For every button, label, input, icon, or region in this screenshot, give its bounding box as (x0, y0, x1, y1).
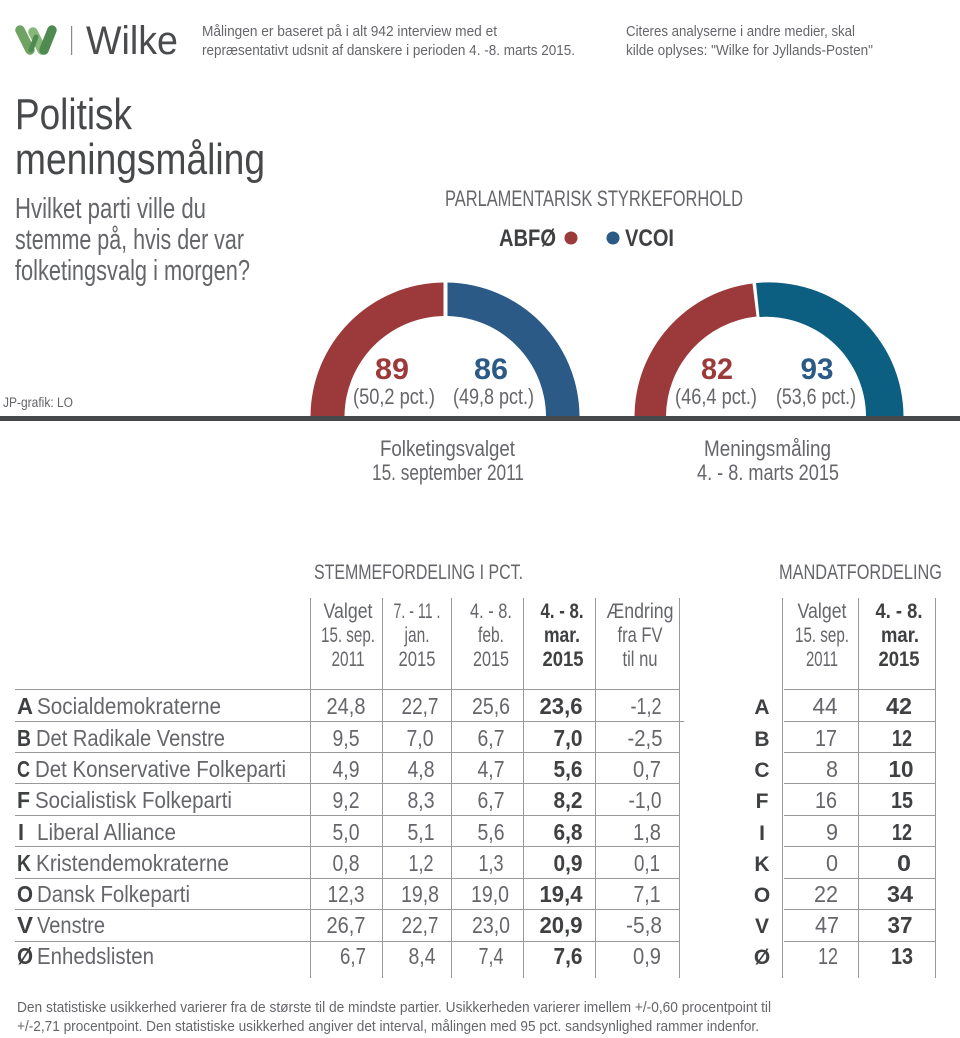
values: februar 2015: 23,0 (472, 912, 510, 938)
values: ændring: 0,9 (633, 943, 661, 969)
values: ændring: -5,8 (626, 912, 662, 938)
values: valget 2011: 0,8 (332, 850, 360, 876)
party letters: B (754, 728, 770, 751)
column headers: 15. sep. (321, 624, 375, 647)
party letters: V (755, 915, 769, 938)
column headers (795, 600, 922, 671)
legend: blocs: ABFØ (499, 225, 556, 252)
caption: folketingsvalget: 15. september 2011 (372, 460, 524, 485)
values: marts 2015: 19,4 (540, 881, 583, 907)
values: februar 2015: 6,7 (478, 787, 504, 813)
chart: meningsmåling 2015: 82 (701, 353, 733, 386)
column headers: 2011 (332, 648, 364, 671)
values: ændring: -1,2 (630, 693, 662, 719)
values: januar 2015: 7,0 (406, 725, 434, 751)
footnote: +/-2,71 procentpoint. Den statistiske usikkerhed angiver det interval, målingen med 95 pct. sandsynlighed rammer indenfor. (17, 1018, 759, 1035)
table: stemmefordeling (15, 598, 684, 978)
values: januar 2015: 8,3 (408, 787, 434, 813)
values: februar 2015: 6,7 (478, 725, 504, 751)
values: valget 2011: 9,5 (332, 725, 360, 751)
values: marts 2015: 23,6 (540, 693, 582, 719)
seats: valget 2011: 12 (818, 943, 838, 969)
logo: Wilke (20, 19, 178, 63)
caption: meningsmåling (697, 436, 839, 485)
values: januar 2015: 5,1 (408, 819, 434, 845)
chart: folketingsvalget 2011: 86 (474, 353, 508, 386)
values: ændring: 7,1 (634, 881, 660, 907)
party labels: A (17, 693, 33, 719)
column headers: 4. - 8. (540, 600, 584, 623)
seats: valget 2011: 22 (814, 881, 838, 907)
party labels: Kristendemokraterne (36, 850, 229, 876)
seats: marts 2015: 37 (888, 912, 912, 938)
text block: citation note (626, 23, 873, 59)
values: ændring: 0,1 (634, 850, 660, 876)
logo: Wilke: Wilke (86, 19, 178, 63)
caption: folketingsvalget (372, 436, 524, 485)
column headers: feb. (478, 624, 504, 647)
values: valget 2011: 5,0 (332, 819, 360, 845)
party labels: K (17, 850, 31, 876)
values: ændring: 0,7 (633, 756, 661, 782)
seats: valget 2011: 16 (815, 787, 837, 813)
party letters: O (754, 884, 770, 907)
chart: meningsmåling 2015: 93 (800, 353, 834, 386)
title (15, 90, 265, 184)
values: februar 2015: 1,3 (478, 850, 504, 876)
seats: marts 2015: 12 (892, 725, 912, 751)
title: Politisk (15, 90, 133, 139)
values: marts 2015: 20,9 (540, 912, 582, 938)
chart: folketingsvalget 2011 (310, 282, 580, 416)
table: mandatfordeling (754, 598, 936, 978)
icon: green W (20, 30, 52, 50)
seats: marts 2015 (886, 693, 914, 969)
legend: blocs: VCOI (625, 225, 674, 252)
seats: valget 2011: 17 (815, 725, 837, 751)
party labels: Enhedslisten (37, 943, 154, 969)
values: marts 2015: 7,6 (554, 943, 582, 969)
party labels: O (17, 881, 33, 907)
party labels: F (17, 787, 30, 813)
party labels: Socialistisk Folkeparti (35, 787, 232, 813)
subtitle question: folketingsvalg i morgen? (15, 255, 250, 287)
caption: meningsmåling: Meningsmåling (704, 436, 831, 461)
column headers: Ændring (606, 600, 674, 623)
values: marts 2015: 7,0 (554, 725, 582, 751)
seats: marts 2015: 34 (887, 881, 913, 907)
column headers: 2015 (398, 648, 436, 671)
values: ændring: -1,0 (628, 787, 662, 813)
party labels: C (17, 756, 30, 782)
column headers: Valget (798, 600, 847, 623)
seats: marts 2015: 10 (888, 756, 914, 782)
seats: valget 2011: 0 (826, 850, 838, 876)
values: ændring: -2,5 (628, 725, 662, 751)
values: valget 2011: 4,9 (332, 756, 360, 782)
seats: marts 2015: 15 (891, 787, 913, 813)
values: valget 2011: 24,8 (326, 693, 366, 719)
seats: valget 2011: 8 (826, 756, 838, 782)
chart: folketingsvalget 2011: (50,2 pct.) (353, 384, 435, 409)
column headers: mar. (881, 624, 919, 647)
party labels: Venstre (37, 912, 105, 938)
column headers: fra FV (618, 624, 662, 647)
column headers: 2015 (542, 648, 584, 671)
seats: marts 2015: 42 (886, 693, 912, 719)
party labels: B (17, 725, 31, 751)
column headers (321, 600, 674, 671)
values: marts 2015 (540, 693, 583, 969)
seats: valget 2011: 44 (812, 693, 838, 719)
values: marts 2015: 6,8 (554, 819, 583, 845)
party labels: Det Konservative Folkeparti (35, 756, 286, 782)
column headers: jan. (404, 624, 430, 647)
values: januar 2015: 8,4 (408, 943, 436, 969)
values: januar 2015: 22,7 (402, 912, 438, 938)
values: valget 2011: 26,7 (326, 912, 366, 938)
text block: method note: Målingen er baseret på i alt 942 interview med et (202, 23, 498, 40)
seats: marts 2015: 13 (891, 943, 913, 969)
subtitle question (15, 193, 250, 287)
party labels: Dansk Folkeparti (37, 881, 190, 907)
party labels (17, 693, 286, 969)
column headers: 2011 (806, 648, 838, 671)
chart: meningsmåling 2015: (53,6 pct.) (776, 384, 856, 409)
party letters: F (756, 790, 769, 813)
subtitle question: Hvilket parti ville du (15, 193, 206, 225)
text block: citation note: Citeres analyserne i andre medier, skal (626, 23, 855, 40)
values: februar 2015: 25,6 (472, 693, 510, 719)
party labels: Socialdemokraterne (37, 693, 221, 719)
seats: valget 2011 (812, 693, 839, 969)
column headers: Valget (324, 600, 373, 623)
values: januar 2015: 22,7 (402, 693, 438, 719)
party letters (754, 696, 770, 969)
values: januar 2015 (401, 693, 439, 969)
footnote: Den statistiske usikkerhed varierer fra de største til de mindste partier. Usikkerheden varierer imellem +/-0,60 procentpoint til (17, 999, 771, 1016)
values: februar 2015 (471, 693, 510, 969)
party letters: C (754, 759, 770, 782)
party labels: I (18, 819, 24, 845)
party labels: Ø (17, 943, 33, 969)
title: meningsmåling (15, 135, 265, 184)
values: marts 2015: 0,9 (554, 850, 582, 876)
party letters: Ø (754, 946, 770, 969)
column headers: 4. - 8. (470, 600, 512, 623)
chart: folketingsvalget 2011: 89 (375, 353, 409, 386)
seats: marts 2015: 12 (892, 819, 912, 845)
values: januar 2015: 4,8 (408, 756, 434, 782)
party labels: Liberal Alliance (37, 819, 176, 845)
values: marts 2015: 5,6 (554, 756, 582, 782)
heading: stemmefordeling: STEMMEFORDELING I PCT. (314, 561, 523, 584)
credit: JP-grafik: LO (3, 394, 73, 410)
text block: method note (202, 23, 575, 59)
party letters: A (754, 696, 770, 719)
values: ændring: 1,8 (633, 819, 661, 845)
chart: meningsmåling 2015: (46,4 pct.) (675, 384, 757, 409)
party letters: K (754, 853, 770, 876)
chart: folketingsvalget 2011: (49,8 pct.) (453, 384, 534, 409)
values: januar 2015: 19,8 (401, 881, 439, 907)
column headers: 7. - 11 . (394, 600, 440, 623)
caption: meningsmåling: 4. - 8. marts 2015 (697, 460, 839, 485)
text block: citation note: kilde oplyses: "Wilke for Jyllands-Posten" (626, 42, 873, 59)
values: ændring (626, 693, 662, 969)
values: valget 2011: 12,3 (328, 881, 364, 907)
values: valget 2011: 9,2 (332, 787, 360, 813)
party letters: I (759, 822, 765, 845)
column headers: 2015 (473, 648, 509, 671)
values: marts 2015: 8,2 (554, 787, 582, 813)
seats: marts 2015: 0 (897, 850, 911, 876)
values: januar 2015: 1,2 (408, 850, 434, 876)
heading: parlamentarisk styrkeforhold: PARLAMENTARISK STYRKEFORHOLD (445, 186, 743, 211)
column headers: 4. - 8. (876, 600, 922, 623)
footnote (17, 999, 771, 1035)
subtitle question: stemme på, hvis der var (15, 224, 244, 256)
caption: folketingsvalget: Folketingsvalget (380, 436, 515, 461)
column headers: mar. (544, 624, 580, 647)
values: februar 2015: 4,7 (478, 756, 504, 782)
party labels: V (17, 912, 34, 938)
text block: method note: repræsentativt udsnit af danskere i perioden 4. -8. marts 2015. (202, 42, 575, 59)
column headers: til nu (622, 648, 658, 671)
party labels: Det Radikale Venstre (36, 725, 225, 751)
values: valget 2011 (326, 693, 366, 969)
legend: blocs (499, 225, 674, 252)
values: valget 2011: 6,7 (340, 943, 366, 969)
values: februar 2015: 7,4 (478, 943, 504, 969)
values: februar 2015: 5,6 (478, 819, 504, 845)
seats: valget 2011: 47 (815, 912, 839, 938)
chart: meningsmåling 2015 (634, 282, 904, 416)
column headers: 2015 (878, 648, 920, 671)
values: februar 2015: 19,0 (471, 881, 509, 907)
seats: valget 2011: 9 (826, 819, 838, 845)
column headers: 15. sep. (795, 624, 849, 647)
